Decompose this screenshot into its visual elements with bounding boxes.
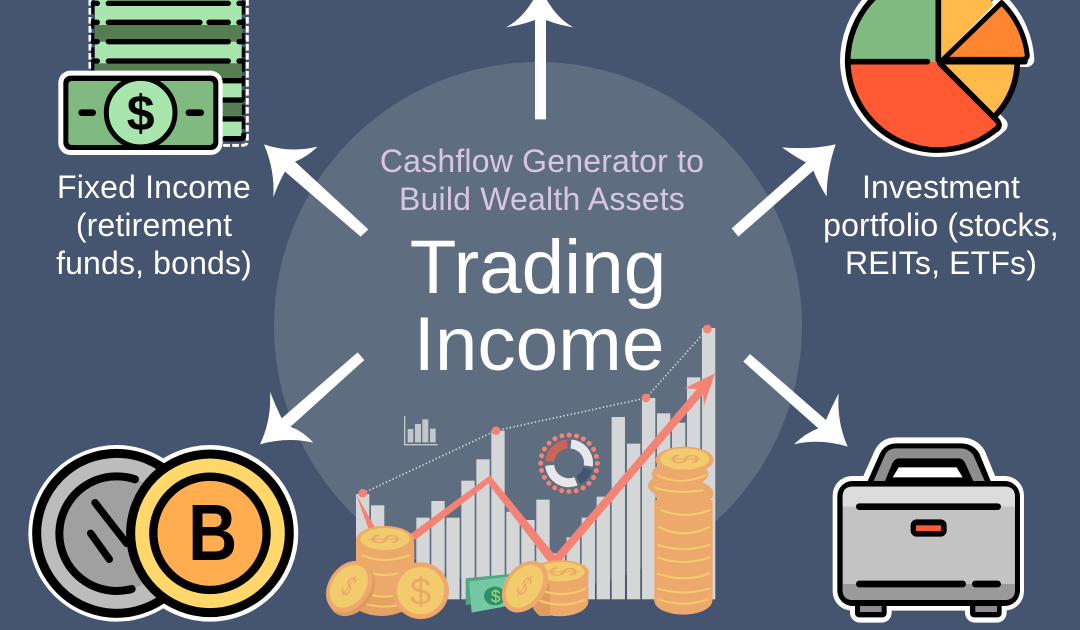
icon: tall coin stack: $ [662,454,708,464]
icon: tilted coin left [315,552,386,625]
arrow: to fixed income [264,144,368,237]
dotted milestone line [358,325,712,498]
icon: coins [28,445,298,622]
icon: green banknotes: $ [491,587,501,607]
label: investment portfolio: Investment [862,169,1020,205]
icon: middle coin stack [532,560,589,616]
icon: briefcase [833,443,1024,623]
title: Income [414,302,664,387]
label: fixed income: funds, bonds) [56,245,252,281]
label: investment portfolio: REITs, ETFs) [845,245,1037,281]
arrow: to crypto coins [260,352,364,444]
bar chart [356,328,715,599]
icon: front coin [392,562,449,619]
icon: tall coin stack [648,447,714,615]
central circle [274,62,802,590]
arrow: to investment portfolio [732,144,836,237]
subtitle: Build Wealth Assets [399,181,685,217]
icon: left coin stack [352,526,414,616]
chart illustration [315,325,715,625]
subtitle: Cashflow Generator to [380,143,704,179]
arrow: to briefcase [743,354,848,447]
icon: small bar chart [405,416,438,445]
icon: pie chart [848,0,1027,150]
title: Trading [410,225,666,310]
label: fixed income: Fixed Income [57,169,251,205]
icon: tilted coin middle: $ [511,570,537,603]
arrow: upward [506,0,573,119]
icon: front coin: $ [410,570,431,613]
icon: donut chart [541,435,597,492]
icon: stack of bills: $ [127,86,155,142]
icon: tilted coin middle [492,552,558,621]
icon: left coin stack: $ [363,534,408,544]
icon: tilted coin left: $ [335,570,362,603]
icon: middle coin stack: $ [540,567,585,576]
trend arrow [356,373,715,564]
icon: coins: B [188,488,237,577]
icon: stack of bills [58,0,247,155]
label: investment portfolio: portfolio (stocks, [823,207,1059,243]
label: fixed income: (retirement [76,207,232,243]
icon: green banknotes [466,574,513,613]
